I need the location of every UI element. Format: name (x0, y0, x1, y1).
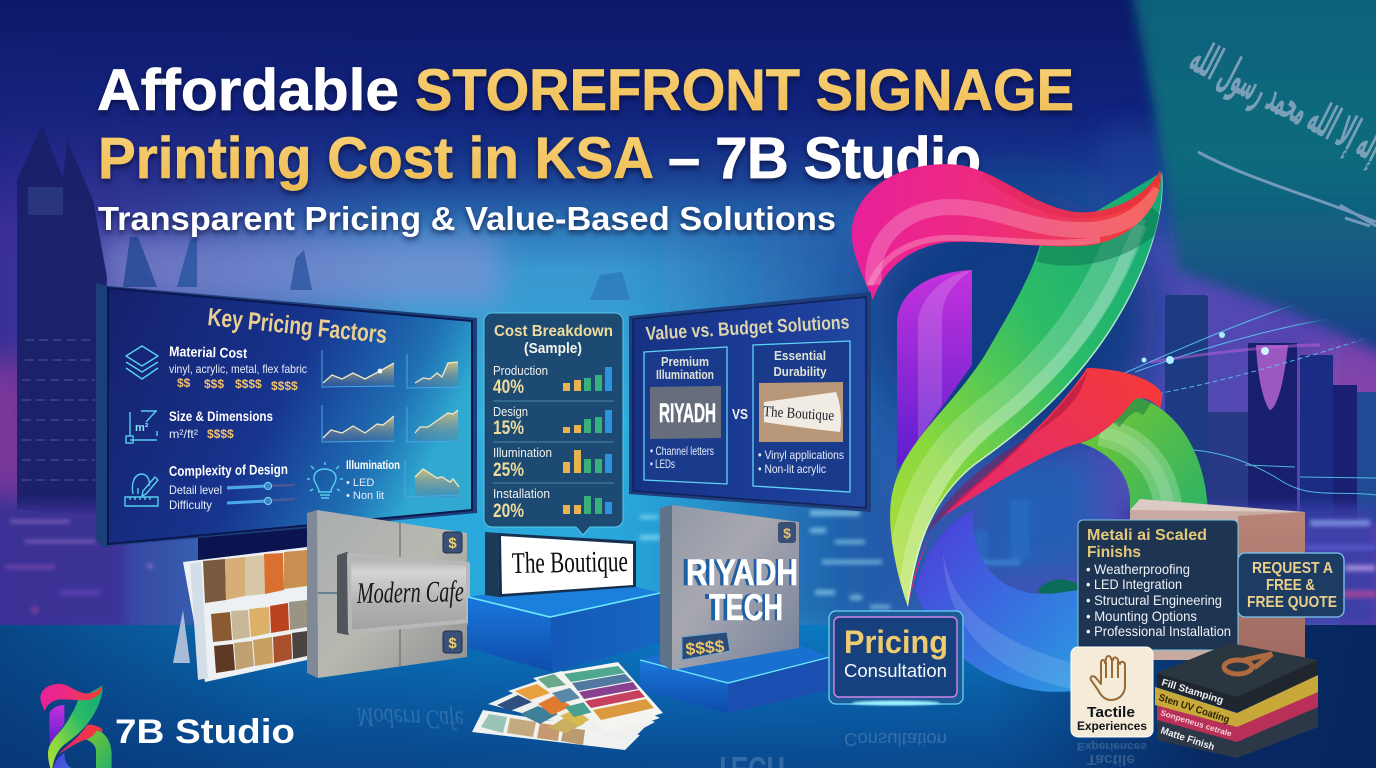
stack labels: Sonpeneus cetrale (1159, 708, 1233, 739)
logo lower red ribbon (908, 368, 1162, 607)
row: illumination: Illumination (493, 445, 552, 460)
mid-ground blurred city lights (480, 500, 1030, 613)
complexity of design text: Detail level (169, 483, 222, 497)
complexity of design text: Difficulty (169, 498, 212, 512)
logo green ribbon (890, 172, 1163, 607)
row: installation: 20% (493, 501, 524, 522)
row: installation (493, 486, 612, 522)
logo green bowl (1080, 398, 1208, 510)
row: illumination (493, 445, 612, 481)
finish bullet list: • LED Integration (1086, 576, 1182, 592)
stack labels: Matte Finish (1159, 725, 1216, 753)
row: design: Design (493, 404, 528, 419)
panel: finishes list (1078, 520, 1238, 650)
subtitle: Transparent Pricing & Value-Based Solutions (98, 200, 836, 237)
line chart 4 (407, 407, 460, 442)
finish bullet list: • Mounting Options (1086, 608, 1197, 624)
reflections (355, 702, 1147, 768)
layer: black (1157, 660, 1318, 712)
floor (0, 625, 1376, 768)
size and dimensions text: $$$$ (207, 427, 234, 441)
panel: key pricing factors (96, 283, 477, 562)
title (97, 58, 1074, 237)
Saudi flag (1130, 0, 1376, 360)
material cost text: Material Cost (169, 343, 248, 361)
panel: value vs budget solutions (629, 292, 871, 512)
stack labels: Sten UV Coating (1157, 692, 1231, 726)
card: essential durability: Essential (774, 348, 826, 363)
icon: hand (1091, 656, 1125, 700)
size and dimensions text: m²/ft² (169, 427, 198, 441)
lightbox: the boutique (485, 532, 636, 597)
layer: gold (1155, 675, 1318, 727)
plinth: boutique (468, 585, 660, 672)
tactile experiences card: Experiences (1077, 721, 1147, 733)
stack labels (1157, 677, 1233, 753)
row: installation: Installation (493, 486, 550, 501)
complexity of design text (169, 461, 288, 512)
icon: light bulb (307, 462, 343, 498)
stack labels: Fill Stamping (1160, 677, 1225, 707)
swatch fan (472, 662, 663, 750)
wall panel: modern cafe (307, 510, 468, 678)
card: essential durability: • Non-lit acrylic (758, 462, 826, 476)
riyadh tech lettering: RIYADH (686, 552, 798, 593)
material cost text: $$$$ (271, 379, 298, 393)
card: essential durability: Durability (774, 364, 827, 379)
riyadh tech lettering: TECH (705, 587, 781, 628)
request quote button: REQUEST A (1252, 560, 1333, 577)
metal plate sign: Modern Cafe (356, 575, 464, 610)
card: premium illumination: • Channel letters (650, 444, 714, 458)
title line 2: – 7B Studio (668, 126, 981, 191)
row: production: 40% (493, 377, 524, 398)
card: premium illumination: • LEDs (650, 457, 675, 471)
illumination text: • LED (346, 477, 374, 489)
title line 1: Affordable (97, 58, 399, 123)
title line 2: Printing Cost in KSA (98, 126, 654, 191)
title line 1: STOREFRONT SIGNAGE (415, 58, 1074, 123)
layer: matte (1157, 707, 1318, 758)
card: premium illumination: Illumination (656, 367, 714, 382)
material cost text: $$$$ (235, 377, 262, 391)
monitor stand (198, 520, 310, 562)
reflection: tactile: Tactile (1087, 751, 1135, 768)
pricing consultation box: Pricing (844, 624, 948, 660)
size and dimensions text (169, 408, 273, 441)
line chart 5 (405, 460, 460, 497)
small logo mark (40, 684, 112, 768)
request quote button (1238, 553, 1344, 617)
riyadh tech lettering: RIYADH (682, 552, 796, 593)
logo top ribbon (852, 164, 1161, 300)
vs label: VS (732, 406, 748, 423)
brand name: 7B Studio (115, 713, 295, 751)
dollar badge (778, 522, 796, 543)
request quote button: FREE & (1266, 577, 1315, 594)
icon: design complexity (125, 474, 158, 506)
riyadh tech lettering (682, 552, 798, 628)
row: production: Production (493, 363, 548, 378)
layer: red (1157, 690, 1318, 742)
card: premium illumination (644, 347, 727, 484)
line chart 2 (407, 354, 460, 388)
finish bullet list: • Structural Engineering (1086, 592, 1222, 608)
logo blue bowl (915, 510, 1080, 692)
dollar badge top (443, 532, 462, 553)
pricing consultation box: Consultation (844, 661, 947, 681)
bottom-left logo (40, 684, 295, 768)
city skyline left (0, 125, 630, 630)
heading: cost breakdown: Cost Breakdown (494, 323, 613, 340)
icon: size dimensions (126, 411, 157, 443)
dollar badge bottom (443, 631, 462, 653)
icon: material layers (126, 346, 158, 379)
finish bullet list (1086, 561, 1231, 639)
price badge (682, 632, 730, 660)
reflection: modern cafe: Modern Cafe (355, 702, 464, 736)
illumination text: • Non lit (346, 490, 384, 502)
riyadh tech lettering: TECH (709, 587, 783, 628)
finish bullet list: • Professional Installation (1086, 623, 1231, 639)
heading: key pricing factors: Key Pricing Factors (206, 303, 388, 349)
logo stem (897, 270, 972, 470)
finish bullet list: • Weatherproofing (1086, 561, 1190, 577)
row: design (493, 404, 612, 439)
card: premium illumination: Premium (661, 354, 709, 369)
copper logo mark (1224, 654, 1272, 674)
price badge: $$$$ (685, 637, 726, 659)
flag sword (1198, 152, 1376, 226)
material cost text: $$$ (204, 377, 224, 391)
tactile experiences card (1071, 647, 1153, 737)
sliders (227, 482, 295, 505)
dollar badge: $ (783, 525, 791, 541)
card: premium illumination: RIYADH (659, 398, 716, 428)
row: illumination: 25% (493, 460, 524, 481)
plinth: riyadh tech (640, 645, 830, 713)
card: essential durability: The Boutique (763, 404, 835, 424)
panel heading: Metali ai Scaled (1087, 527, 1207, 544)
reflection: consultation: Consultation (844, 729, 947, 749)
card: essential durability (753, 341, 850, 492)
material swatch board (173, 547, 307, 682)
title line 1 (97, 58, 1074, 123)
illumination text: Illumination (346, 458, 400, 472)
heading: value vs budget: Value vs. Budget Solutions (645, 312, 850, 345)
row: design: 15% (493, 418, 524, 439)
dollar badge bottom: $ (448, 635, 457, 652)
tactile label: Tactile (1087, 704, 1135, 721)
size and dimensions text: Size & Dimensions (169, 408, 273, 424)
material cost text: vinyl, acrylic, metal, flex fabric (169, 362, 307, 376)
title line 2 (98, 126, 981, 191)
row: production (493, 363, 612, 398)
line chart 1 (322, 350, 395, 387)
icon: size dimensions: m² (135, 422, 149, 434)
material cost text (169, 343, 307, 393)
finish sample stack (1155, 643, 1318, 758)
large 7B logo (852, 164, 1208, 692)
metal finish box (1130, 499, 1305, 660)
reflection: experiences: Experiences (1077, 740, 1147, 752)
panel: cost breakdown (484, 313, 623, 535)
metal plate sign (338, 553, 468, 634)
city skyline right (1120, 282, 1376, 625)
request quote button: FREE QUOTE (1247, 594, 1337, 611)
pricing consultation box (829, 611, 963, 706)
line chart 3 (322, 405, 395, 442)
material cost text: $$ (177, 376, 191, 390)
illumination text (346, 458, 400, 502)
card: essential durability: • Vinyl applications (758, 448, 844, 462)
lightbox: the boutique: The Boutique (512, 545, 628, 580)
dollar badge top: $ (448, 535, 457, 552)
complexity of design text: Complexity of Design (169, 461, 288, 479)
panel: finishes list: Finishs (1087, 544, 1141, 561)
sign: riyadh tech (660, 505, 799, 670)
subheading: sample: (Sample) (524, 340, 582, 357)
